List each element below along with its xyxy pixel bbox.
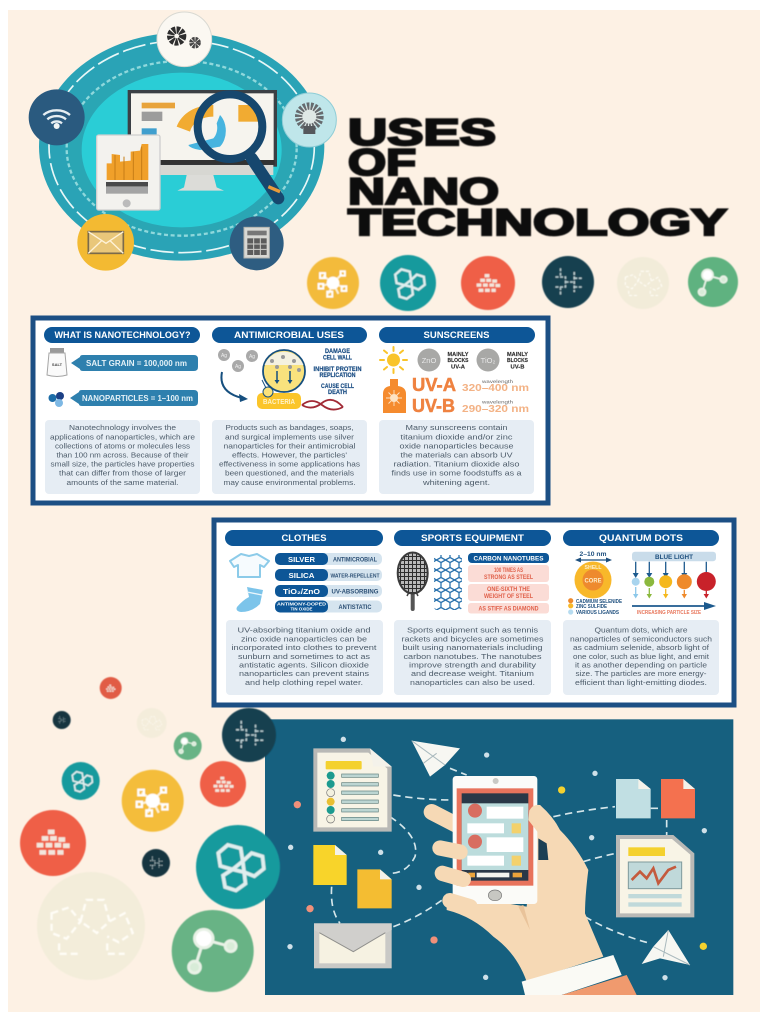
- text block: nanotechnology: Nanotechnology involves the: [69, 423, 176, 432]
- callout: one-sixth weight: [468, 584, 549, 601]
- icon: ZnO: [418, 348, 440, 372]
- title: USES: [348, 112, 496, 153]
- label: blocks UV-A: UV-A: [451, 364, 466, 370]
- text block: sports equipment: Sports equipment such as tennis: [407, 626, 538, 635]
- icon: orange-yellow document: [357, 869, 392, 908]
- label: UV-A: wavelength: [482, 379, 514, 384]
- icon: paper plane lower: [642, 930, 690, 965]
- label: blocks UV-A: BLOCKS: [448, 358, 469, 364]
- row: silver: [275, 553, 382, 565]
- label: increasing particle size: INCREASING PARTICLE SIZE: [637, 610, 701, 616]
- labels: antimicrobial effects: CAUSE CELL: [321, 383, 354, 390]
- row: antimony-doped tin oxide: [275, 600, 382, 612]
- label: UV-B: [412, 396, 529, 416]
- title: NANO: [348, 171, 499, 212]
- label: blocks UV-A: MAINLY: [448, 352, 469, 358]
- text block: antimicrobial: may cause environmental problems.: [224, 478, 356, 487]
- label: UV-A: UV-A: [412, 375, 456, 395]
- teal ring: [39, 33, 324, 261]
- row: antimony-doped tin oxide: ANTIMONY-DOPED: [277, 602, 326, 606]
- text block: antimicrobial: nanoparticles for their antimicrobial: [224, 441, 356, 450]
- icon: quantum dot core and shell: CORE: [584, 578, 602, 584]
- callout: stiff as diamond: AS STIFF AS DIAMOND: [478, 606, 539, 612]
- heading: what is nanotechnology: [44, 327, 200, 343]
- callout: salt grain: [71, 355, 198, 371]
- callout: stiff as diamond: [468, 603, 549, 614]
- text block: nanotechnology: [45, 420, 200, 494]
- text block: sunscreens: [379, 420, 534, 494]
- monitor: [129, 92, 275, 191]
- labels: antimicrobial effects: DAMAGE: [325, 348, 351, 355]
- text block: clothes: and help clothing repel water.: [245, 678, 363, 687]
- callout: nanoparticles: NANOPARTICLES = 1–100 nm: [82, 394, 193, 403]
- icon: carbon nanotube: [434, 555, 462, 610]
- illustration: hand holding phone on blue panel: [265, 719, 733, 995]
- icon: ZnO: ZnO: [422, 356, 436, 365]
- text block: nanotechnology: collections of atoms or molecules less: [55, 441, 190, 450]
- phone: [453, 776, 537, 904]
- text block: quantum dots: efficient than light-emitting diodes.: [575, 678, 707, 687]
- legend: quantum dot materials: CADMIUM SELENIDE: [576, 599, 622, 605]
- text block: clothes: zinc oxide nanoparticles can be: [241, 635, 367, 644]
- label: UV-B: 290–320 nm: [462, 403, 529, 415]
- document: checklist: [313, 748, 392, 832]
- label: particle size range: 2–10 nm: [580, 551, 607, 558]
- text block: antimicrobial: been questioned, and the materials: [225, 469, 354, 478]
- heading: antimicrobial uses: [212, 327, 367, 343]
- badge: dark network: [542, 256, 594, 308]
- icon: quantum dot core and shell: [574, 562, 612, 598]
- bubble: large red: [20, 810, 86, 876]
- hand: fingers and thumb: [440, 805, 555, 930]
- text block: nanotechnology: than 100 nm across. Because of their: [56, 450, 189, 459]
- row: silver: SILVER: [288, 555, 316, 564]
- legend: quantum dot materials: [568, 598, 622, 616]
- text block: quantum dots: one color, such as blue light, and emit: [573, 652, 709, 661]
- heading: quantum dots: [563, 530, 719, 546]
- labels: antimicrobial effects: REPLICATION: [320, 372, 356, 379]
- icon: silver ions: [218, 349, 258, 372]
- text block: antimicrobial: effects. However, the particles': [232, 450, 348, 459]
- row: antimony-doped tin oxide: TIN OXIDE: [290, 606, 313, 612]
- bubble: small green: [174, 732, 202, 760]
- row: TiO2/ZnO: UV-ABSORBING: [332, 590, 379, 596]
- text block: sports equipment: [394, 620, 551, 695]
- label: blue light: [632, 552, 716, 561]
- title: OF: [348, 142, 416, 183]
- bubble: small teal: [62, 762, 100, 800]
- badge: gears: [157, 12, 212, 67]
- icon: red document: [661, 779, 695, 818]
- row: antimony-doped tin oxide: ANTISTATIC: [338, 605, 372, 611]
- callout: 100 times as strong: [468, 565, 549, 582]
- heading: quantum dots: QUANTUM DOTS: [599, 533, 683, 543]
- text block: clothes: incorporated into clothes to prevent: [232, 643, 376, 652]
- bubble: dark network: [222, 708, 276, 762]
- icon: silver ions: Ag: [235, 364, 241, 370]
- icon: damaged strand: [302, 400, 343, 410]
- bubble: yellow hub: [122, 770, 184, 832]
- badge: wifi: [29, 89, 85, 145]
- icon: t-shirt: [230, 554, 269, 577]
- text block: sports equipment: improve strength and durability: [409, 661, 536, 670]
- text block: sports equipment: and decrease weight. Titanium: [411, 669, 534, 678]
- label: particle size range: [575, 551, 612, 562]
- illustration: monitor ring with magnifier: [29, 12, 336, 271]
- arrow: ions to bacteria: [221, 372, 248, 402]
- text block: sunscreens: titanium dioxide and/or zinc: [400, 432, 513, 441]
- legend: quantum dot materials: ZINC SULFIDE: [576, 604, 607, 610]
- heading: clothes: CLOTHES: [282, 533, 326, 543]
- label: blocks UV-B: MAINLY: [507, 352, 528, 358]
- text block: sports equipment: built using nanomaterials including: [402, 643, 542, 652]
- icon: TiO2: [476, 348, 500, 372]
- badge: red bricks: [461, 256, 515, 310]
- text block: nanotechnology: amounts of the same material.: [66, 478, 178, 487]
- callout: 100 times as strong: 100 TIMES AS: [494, 568, 523, 574]
- text block: sunscreens: finds use in some foodstuffs as a: [392, 469, 523, 478]
- icon: quantum dot core and shell: SHELL: [584, 565, 602, 571]
- label: UV-A: [412, 375, 529, 395]
- row: silica: WATER-REPELLENT: [330, 574, 380, 580]
- heading: sports equipment: [394, 530, 551, 546]
- badge: cream lattice: [617, 257, 669, 309]
- icon: bacteria cell: [257, 350, 305, 409]
- bubble: small dark: [142, 849, 170, 877]
- labels: antimicrobial effects: CELL WALL: [323, 354, 352, 362]
- dashed connectors: [331, 768, 667, 943]
- panel: what is, antimicrobial, sunscreens: [33, 318, 548, 503]
- tablet with bar chart: [97, 135, 160, 210]
- hand: palm: [447, 805, 603, 982]
- label: carbon nanotubes: CARBON NANOTUBES: [474, 556, 544, 562]
- icon: silver ions: Ag: [221, 353, 227, 359]
- text block: clothes: nanoparticles can prevent stains: [239, 669, 369, 678]
- labels: antimicrobial effects: [314, 348, 362, 396]
- panel: clothes, sports equipment, quantum dots: [214, 520, 734, 705]
- text block: quantum dots: Quantum dots, which are: [594, 626, 688, 635]
- row: TiO2/ZnO: TiO₂/ZnO: [283, 587, 320, 596]
- badge: calculator: [230, 216, 284, 270]
- icon: paper plane: [412, 741, 460, 777]
- icon: TiO2: TiO₂: [481, 356, 495, 365]
- icon: salt jar: SALT: [52, 362, 63, 367]
- label: carbon nanotubes: [468, 553, 549, 563]
- text block: nanotechnology: small size, the particles have properties: [50, 460, 195, 469]
- text block: sunscreens: oxide nanoparticles because: [400, 441, 514, 450]
- row of molecule badges: [307, 255, 738, 311]
- label: UV-B: wavelength: [482, 400, 514, 404]
- cluster of molecule bubbles: [20, 677, 280, 992]
- document: line chart: [616, 835, 694, 917]
- heading: clothes: [225, 530, 383, 546]
- text block: antimicrobial: [212, 420, 367, 494]
- sparkle dots: [287, 737, 707, 980]
- text block: quantum dots: [563, 620, 719, 695]
- bubble: faint cream: [137, 708, 167, 738]
- icon: tennis racket: [398, 552, 428, 611]
- chart: particle size vs emitted colour: [632, 562, 716, 598]
- callout: one-sixth weight: WEIGHT OF STEEL: [484, 594, 533, 600]
- bubble: large teal: [196, 825, 280, 909]
- text block: quantum dots: nanoparticles of semiconductors such: [570, 635, 712, 644]
- text block: sports equipment: carbon nanotubes. The nanotubes: [404, 652, 542, 661]
- text block: clothes: sunburn and sometimes to act as: [238, 652, 370, 661]
- text block: sunscreens: Many sunscreens contain: [406, 423, 508, 432]
- bubble: tiny dark: [53, 711, 71, 729]
- sleeve: [562, 975, 637, 995]
- text block: antimicrobial: effectiveness in some applications has: [219, 460, 360, 469]
- text block: sports equipment: rackets and bicycles are sometimes: [402, 635, 544, 644]
- text block: sports equipment: nanoparticles can also be used.: [410, 678, 535, 687]
- bubble: large cream: [37, 872, 145, 980]
- title: TECHNOLOGY: [348, 202, 727, 243]
- row: TiO2/ZnO: [275, 585, 382, 597]
- magnifier: [198, 94, 280, 198]
- labels: antimicrobial effects: INHIBIT PROTEIN: [314, 366, 362, 373]
- badge: yellow hub: [307, 257, 359, 309]
- label: UV-B: UV-B: [412, 396, 455, 416]
- callout: 100 times as strong: STRONG AS STEEL: [484, 575, 533, 581]
- bubble: medium red: [200, 761, 246, 807]
- text block: quantum dots: size. The particles are more energy-: [576, 669, 707, 678]
- heading: what is nanotechnology: WHAT IS NANOTECHNOLOGY?: [54, 330, 190, 340]
- callout: nanoparticles: [70, 390, 198, 406]
- badge: teal hexagons: [380, 255, 436, 311]
- badge: green nodes: [688, 257, 738, 307]
- label: UV-A: 320–400 nm: [462, 382, 529, 394]
- text block: sunscreens: radiation. Titanium dioxide also: [394, 460, 520, 469]
- icon: light blue document: [616, 779, 651, 818]
- labels: antimicrobial effects: DEATH: [328, 389, 347, 396]
- bubble: small red: [100, 677, 122, 699]
- icon: yellow document: [313, 845, 347, 885]
- heading: sunscreens: [379, 327, 535, 343]
- badge: light bulb: [282, 93, 336, 147]
- icon: envelope: [314, 923, 392, 968]
- label: blocks UV-B: [507, 352, 528, 370]
- label: blue light: BLUE LIGHT: [655, 554, 693, 561]
- icon: silver ions: Ag: [249, 354, 255, 360]
- text block: antimicrobial: and surgical implements use silver: [225, 432, 355, 441]
- heading: sports equipment: SPORTS EQUIPMENT: [421, 533, 525, 543]
- hand: index finger: [432, 812, 463, 828]
- icon: salt jar: [47, 348, 67, 376]
- shirt cuff: [522, 955, 622, 995]
- text block: sunscreens: the materials can absorb UV: [400, 450, 513, 459]
- text block: nanotechnology: that can differ from those of larger: [59, 469, 187, 478]
- title: [348, 112, 727, 243]
- icon: sunscreen bottle: [383, 379, 406, 413]
- row: silica: [275, 569, 382, 581]
- text block: sunscreens: whitening agent.: [422, 478, 490, 487]
- text block: quantum dots: as cadmium selenide, absorb light of: [573, 643, 710, 652]
- icon: sock: [236, 587, 263, 612]
- icon: sun: [380, 347, 407, 373]
- label: blocks UV-B: UV-B: [510, 364, 524, 370]
- arrow: increasing particle size: [632, 602, 716, 610]
- text block: quantum dots: it as another depending on particle: [575, 661, 707, 670]
- callout: one-sixth weight: ONE-SIXTH THE: [487, 587, 530, 593]
- label: blocks UV-B: BLOCKS: [507, 358, 528, 364]
- label: blocks UV-A: [448, 352, 469, 370]
- badge: mail: [77, 214, 134, 271]
- text block: clothes: [226, 620, 383, 695]
- row: silver: ANTIMICROBIAL: [333, 558, 377, 564]
- callout: salt grain: SALT GRAIN = 100,000 nm: [86, 359, 187, 368]
- text block: nanotechnology: applications of nanoparticles, which are: [50, 432, 195, 441]
- icon: nanoparticles: [48, 392, 64, 407]
- text block: clothes: UV-absorbing titanium oxide and: [238, 626, 370, 635]
- row: silica: SILICA: [288, 571, 315, 580]
- text block: antimicrobial: Products such as bandages, soaps,: [226, 423, 354, 432]
- heading: sunscreens: SUNSCREENS: [424, 330, 490, 340]
- legend: quantum dot materials: VARIOUS LIGANDS: [576, 610, 619, 616]
- bubble: large green: [172, 910, 254, 992]
- icon: bacteria cell: BACTERIA: [263, 399, 295, 406]
- heading: antimicrobial uses: ANTIMICROBIAL USES: [234, 330, 344, 340]
- text block: clothes: antistatic agents. Silicon dioxide: [239, 661, 369, 670]
